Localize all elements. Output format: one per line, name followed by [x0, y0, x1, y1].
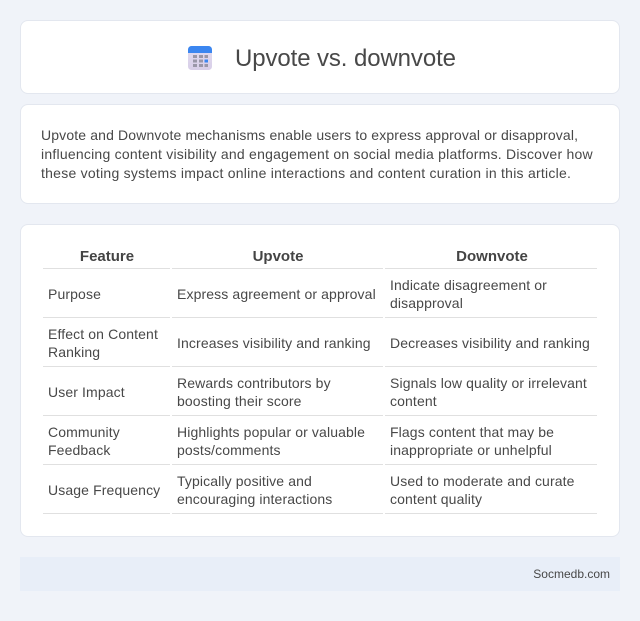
row: usage frequency: Used to moderate and curate	[390, 473, 575, 489]
intro text	[41, 127, 593, 181]
row: community feedback: Feedback	[48, 442, 110, 458]
row: community feedback: inappropriate or unhelpful	[390, 442, 552, 458]
column headers: Feature	[80, 248, 134, 265]
row: usage frequency: Typically positive and	[177, 473, 312, 489]
row: purpose: Purpose	[48, 286, 101, 302]
row: community feedback: Community	[48, 424, 120, 440]
row: user impact	[48, 375, 587, 409]
row: community feedback	[48, 424, 554, 458]
comparison table	[43, 248, 597, 514]
intro text: influencing content visibility and engagement on social media platforms. Discover how	[41, 146, 593, 162]
row: usage frequency: encouraging interactions	[177, 491, 332, 507]
row: user impact: boosting their score	[177, 393, 302, 409]
table card	[20, 224, 620, 537]
row: user impact: content	[390, 393, 437, 409]
intro card	[20, 104, 620, 204]
row: effect on content ranking: Increases visibility and ranking	[177, 335, 371, 351]
column headers	[80, 248, 528, 265]
column headers: Downvote	[456, 248, 528, 265]
column headers: Upvote	[253, 248, 303, 265]
heading: Upvote vs. downvote	[235, 45, 456, 72]
row: purpose	[48, 277, 547, 311]
row: effect on content ranking	[48, 326, 590, 360]
intro text: Upvote and Downvote mechanisms enable users to express approval or disapproval,	[41, 127, 578, 143]
footer bar	[20, 557, 620, 591]
row: usage frequency	[48, 473, 575, 507]
footer text: Socmedb.com	[533, 567, 610, 581]
row: effect on content ranking: Effect on Content	[48, 326, 158, 342]
row: purpose: Indicate disagreement or	[390, 277, 547, 293]
row: community feedback: Flags content that may be	[390, 424, 554, 440]
title card	[20, 20, 620, 94]
row: user impact: User Impact	[48, 384, 125, 400]
row: effect on content ranking: Decreases visibility and ranking	[390, 335, 590, 351]
icon: calendar	[188, 46, 212, 70]
row: effect on content ranking: Ranking	[48, 344, 100, 360]
row: user impact: Rewards contributors by	[177, 375, 331, 391]
row: user impact: Signals low quality or irrelevant	[390, 375, 587, 391]
row: purpose: disapproval	[390, 295, 463, 311]
intro text: these voting systems impact online interactions and content curation in this article.	[41, 165, 571, 181]
row: community feedback: posts/comments	[177, 442, 281, 458]
row: community feedback: Highlights popular or valuable	[177, 424, 365, 440]
row: purpose: Express agreement or approval	[177, 286, 376, 302]
row: usage frequency: Usage Frequency	[48, 482, 160, 498]
row: usage frequency: content quality	[390, 491, 482, 507]
